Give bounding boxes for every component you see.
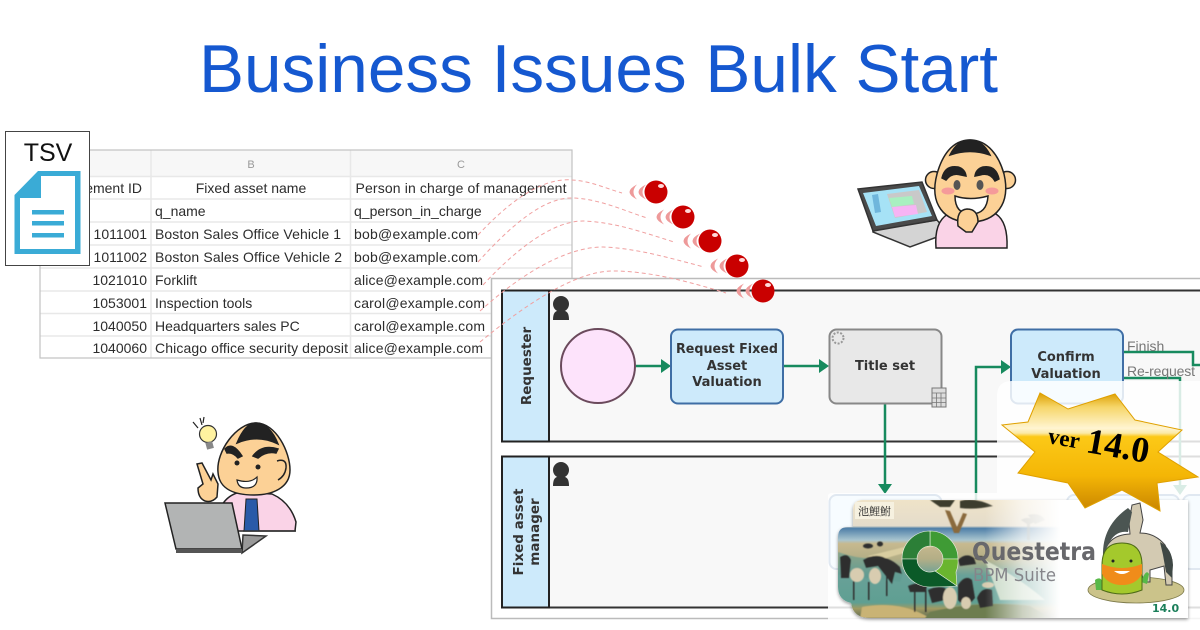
- spreadsheet table: Headquarters sales PC: [155, 318, 300, 334]
- spreadsheet table: carol@example.com: [354, 318, 485, 334]
- dashed connectors from addresses to tokens: [478, 180, 726, 342]
- start event: [561, 329, 635, 403]
- task: Request Fixed Asset Valuation: Valuation: [692, 375, 762, 390]
- spreadsheet table: Boston Sales Office Vehicle 1: [155, 226, 341, 242]
- title cartouche: 池鯉鮒: [858, 503, 891, 519]
- branch labels: Re-request: [1127, 363, 1195, 379]
- swimlane: fixed asset manager: Fixed asset: [511, 488, 527, 575]
- spreadsheet table: Inspection tools: [155, 295, 252, 311]
- swimlane: requester: Requester: [519, 327, 535, 405]
- laptop: [858, 182, 948, 247]
- Questetra wordmark: BPM Suite: [973, 565, 1056, 586]
- spreadsheet table: 1021010: [92, 272, 147, 288]
- title: Business Issues Bulk Start: [199, 31, 998, 107]
- version badge star: [1002, 393, 1198, 511]
- TSV file icon: [6, 132, 90, 266]
- mascot: horse and green character: [1088, 503, 1184, 615]
- light bulb idea: [193, 417, 216, 450]
- fade to white: [985, 500, 1060, 618]
- tree: [945, 510, 967, 533]
- task: Request Fixed Asset Valuation: [671, 330, 783, 404]
- task: Confirm Valuation: Confirm: [1037, 350, 1095, 365]
- Questetra wordmark: [972, 537, 1096, 586]
- task: Confirm Valuation: Valuation: [1031, 367, 1101, 382]
- spreadsheet table: 1040050: [92, 318, 147, 334]
- sequence arrows: [636, 352, 1200, 500]
- spreadsheet table: 1040060: [92, 340, 147, 356]
- task: Request Fixed Asset Valuation: Request Fixed: [676, 342, 778, 357]
- spreadsheet table: 1053001: [92, 295, 147, 311]
- spreadsheet table: q_person_in_charge: [354, 203, 482, 219]
- spreadsheet table: Forklift: [155, 272, 197, 288]
- spreadsheet table: carol@example.com: [354, 295, 485, 311]
- task: Title set: Title set: [855, 359, 915, 374]
- version badge star: 14.0: [1084, 420, 1153, 471]
- spreadsheet table: B: [247, 159, 255, 171]
- task: Confirm Valuation: [1011, 330, 1123, 404]
- spreadsheet table: Person in charge of management: [356, 180, 567, 196]
- swimlane: fixed asset manager: manager: [527, 498, 543, 566]
- task: Request Fixed Asset Valuation: Asset: [707, 359, 747, 374]
- version badge star: ver: [1046, 423, 1082, 453]
- branch labels: Finish: [1127, 338, 1164, 354]
- spreadsheet table: 1011001: [94, 226, 147, 242]
- Questetra logo mark: [902, 531, 958, 587]
- spreadsheet table: Fixed asset name: [196, 180, 306, 196]
- panel: workflow diagram: [492, 278, 1200, 618]
- herd of horses: [840, 542, 993, 612]
- branch labels: [1127, 338, 1195, 379]
- task: partly hidden lower task: [830, 495, 1200, 569]
- white veil behind product banner: [828, 381, 1200, 630]
- swimlane: fixed asset manager: [502, 456, 1200, 608]
- spreadsheet table: q_name: [155, 203, 206, 219]
- token 4: [710, 254, 748, 278]
- character: man with idea and laptop: [165, 417, 296, 553]
- banner: Questetra BPM Suite: [838, 500, 1188, 618]
- spreadsheet table: alice@example.com: [354, 340, 483, 356]
- swimlane: requester: [502, 290, 1200, 442]
- mascot: horse and green character: 14.0: [1152, 602, 1179, 615]
- laptop: [165, 503, 266, 553]
- token 2: [656, 206, 694, 228]
- spreadsheet table: [40, 150, 572, 358]
- spreadsheet table: Boston Sales Office Vehicle 2: [155, 249, 342, 265]
- spreadsheet table: 1011002: [94, 249, 147, 265]
- token 1: [630, 180, 668, 204]
- TSV file icon: TSV: [24, 139, 73, 167]
- token 5: [736, 280, 774, 302]
- spreadsheet table: bob@example.com: [354, 226, 478, 242]
- spreadsheet table: alice@example.com: [354, 272, 483, 288]
- Questetra wordmark: Questetra: [972, 537, 1096, 566]
- spreadsheet table: Chicago office security deposit: [155, 340, 348, 356]
- token 3: [684, 230, 722, 252]
- spreadsheet table: C: [457, 159, 465, 171]
- task: Title set: [830, 330, 946, 407]
- spreadsheet table: bob@example.com: [354, 249, 478, 265]
- character: happy man with laptop: [858, 140, 1016, 248]
- ukiyo-e painting: [838, 500, 1055, 618]
- spreadsheet table: Management ID: [42, 180, 142, 196]
